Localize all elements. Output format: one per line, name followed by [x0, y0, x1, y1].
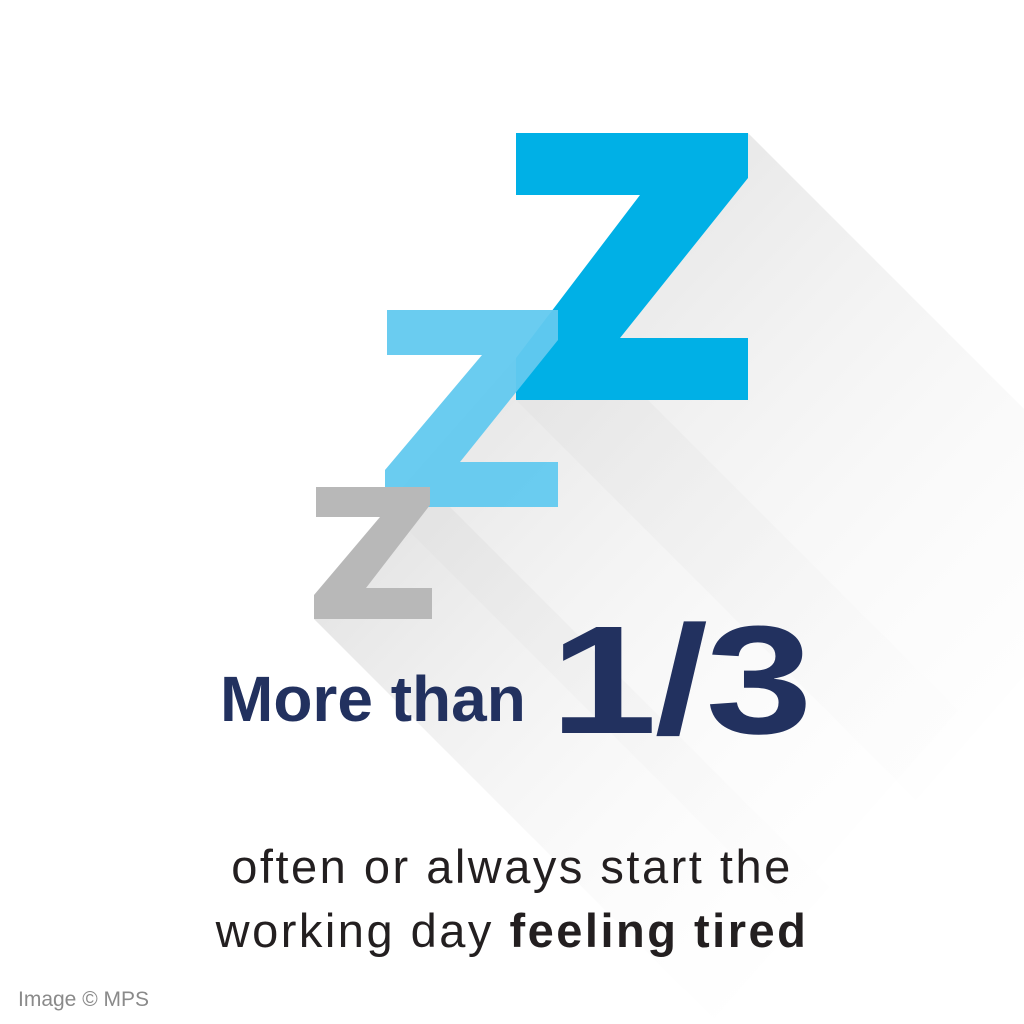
- headline: More than 1/3: More than: [220, 663, 526, 735]
- icon: medium Z: [385, 310, 558, 507]
- icon: small Z: [314, 487, 432, 619]
- headline: More than 1/3: [220, 594, 810, 766]
- icon: large Z: [516, 133, 748, 400]
- credit: Image © MPS: [18, 988, 149, 1011]
- headline: More than 1/3: 1/3: [550, 594, 810, 766]
- shadow: large Z: [516, 133, 1024, 800]
- caption text: working day feeling tired: [216, 904, 808, 957]
- shadow: medium Z: [385, 310, 958, 907]
- caption text: often or always start the: [231, 840, 793, 893]
- caption text: [216, 840, 808, 957]
- shadow: small Z: [314, 487, 830, 1019]
